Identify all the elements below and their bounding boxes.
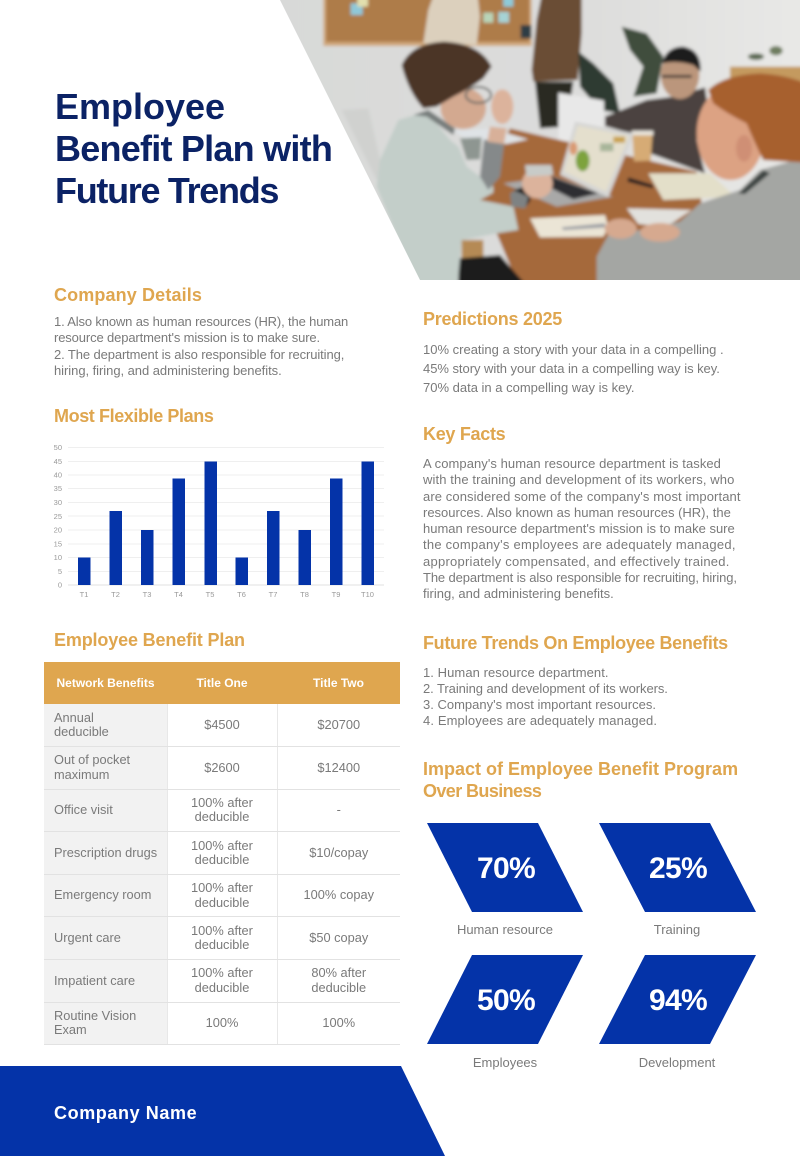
table: employee benefit plan xyxy=(44,662,400,1045)
table: employee benefit plan: - xyxy=(337,802,341,817)
bar chart: most flexible plans: 25 xyxy=(54,512,62,521)
text: company details xyxy=(54,314,348,378)
bar chart: most flexible plans: 20 xyxy=(54,526,62,534)
text: key facts: appropriately compensated, and effectively trained. xyxy=(423,554,730,568)
table: employee benefit plan: 100% after xyxy=(191,923,253,938)
table: employee benefit plan: 100% after xyxy=(191,965,253,980)
table: employee benefit plan: 100% after xyxy=(191,880,253,895)
heading: key facts: Key Facts xyxy=(423,424,505,444)
text: future trends list: 2. Training and development of its workers. xyxy=(423,681,668,696)
bar chart: most flexible plans: 40 xyxy=(54,470,62,480)
label: human resource: Human resource xyxy=(457,922,553,937)
table: employee benefit plan: Office visit xyxy=(54,802,113,817)
text: company details: resource department's mission is to make sure. xyxy=(54,330,320,345)
table: employee benefit plan: $20700 xyxy=(317,717,360,732)
text: company details: 1. Also known as human resources (HR), the human xyxy=(54,314,348,329)
text: key facts: A company's human resource department is tasked xyxy=(423,456,721,471)
stat: 50%: 50% xyxy=(477,984,535,1017)
bar chart: most flexible plans: T4 xyxy=(174,590,183,599)
table: employee benefit plan: deducible xyxy=(195,980,249,995)
table: employee benefit plan: Emergency room xyxy=(54,887,151,902)
text: future trends list: 4. Employees are adequately managed. xyxy=(423,713,657,728)
bar chart: most flexible plans: T3 xyxy=(143,590,151,599)
bar chart: most flexible plans: 5 xyxy=(58,567,62,576)
bar chart: most flexible plans: 0 xyxy=(58,580,62,590)
title xyxy=(55,86,332,211)
label: employees: Employees xyxy=(473,1055,537,1070)
heading: predictions 2025: Predictions 2025 xyxy=(423,309,562,329)
footer band xyxy=(0,1066,445,1156)
stat: 94%: 94% xyxy=(649,984,707,1017)
text: future trends list: 1. Human resource department. xyxy=(423,665,609,680)
text: key facts: are considered some of the company's most important xyxy=(423,488,741,504)
heading: impact of program: Over Business xyxy=(423,781,541,801)
table: employee benefit plan: Urgent care xyxy=(54,930,121,945)
text: predictions 2025: 10% creating a story with your data in a compelling . xyxy=(423,342,724,357)
heading: future trends: Future Trends On Employee Benefits xyxy=(423,633,728,653)
bar chart: most flexible plans: 50 xyxy=(54,443,62,452)
label: training: Training xyxy=(654,922,700,937)
text: company details: 2. The department is also responsible for recruiting, xyxy=(54,347,344,362)
stat shapes: four parallelograms xyxy=(427,823,756,1044)
text: predictions 2025 xyxy=(423,342,724,395)
bar chart: most flexible plans: 30 xyxy=(54,498,62,507)
table: employee benefit plan: maximum xyxy=(54,767,109,782)
bar chart: most flexible plans: T10 xyxy=(361,590,374,599)
heading: impact of program: Impact of Employee Benefit Program xyxy=(423,759,738,779)
table: employee benefit plan: $4500 xyxy=(204,717,240,732)
bar chart: most flexible plans: T8 xyxy=(300,590,309,599)
table: employee benefit plan: Annual xyxy=(54,710,94,725)
bar chart: most flexible plans: T9 xyxy=(332,590,340,599)
bar chart: most flexible plans: 45 xyxy=(54,457,62,466)
bar chart: most flexible plans: 10 xyxy=(54,553,62,562)
text: key facts: the company's employees are adequately managed, xyxy=(423,537,736,552)
bar chart: most flexible plans: 35 xyxy=(54,484,62,493)
table: employee benefit plan: Prescription drugs xyxy=(54,845,157,860)
text: company details: hiring, firing, and administering benefits. xyxy=(54,363,282,378)
table: employee benefit plan: Routine Vision xyxy=(54,1008,136,1023)
text: predictions 2025: 70% data in a compelling way is key. xyxy=(423,380,634,395)
table: employee benefit plan: deducible xyxy=(195,937,249,952)
bar chart: most flexible plans: T5 xyxy=(206,590,214,599)
heading: company details: Company Details xyxy=(54,285,202,305)
table: employee benefit plan: 100% after xyxy=(191,838,253,853)
table: employee benefit plan: 100% after xyxy=(191,795,253,810)
table: employee benefit plan: 80% after xyxy=(311,965,366,980)
heading: employee benefit plan: Employee Benefit Plan xyxy=(54,630,245,650)
bar chart: most flexible plans: T6 xyxy=(237,590,246,599)
table: employee benefit plan: deducible xyxy=(311,980,366,995)
table: employee benefit plan: Title Two xyxy=(313,676,364,690)
table: employee benefit plan: deducible xyxy=(195,809,249,824)
table: employee benefit plan: $12400 xyxy=(317,760,360,775)
text: key facts: resources. Also known as human resources (HR), the xyxy=(423,505,731,520)
table: employee benefit plan: deducible xyxy=(195,852,249,867)
text: predictions 2025: 45% story with your data in a compelling way is key. xyxy=(423,361,720,376)
footer: company name: Company Name xyxy=(54,1103,197,1123)
stat: 25%: 25% xyxy=(649,852,707,885)
text: key facts xyxy=(423,456,741,601)
text: key facts: firing, and administering benefits. xyxy=(423,586,614,601)
table: employee benefit plan: $2600 xyxy=(204,760,240,775)
label: development: Development xyxy=(639,1055,715,1070)
text: future trends list xyxy=(423,665,668,728)
table: employee benefit plan: Network Benefits xyxy=(56,676,155,690)
heading: most flexible plans: Most Flexible Plans xyxy=(54,406,213,426)
table: employee benefit plan: deducible xyxy=(54,724,109,739)
table: employee benefit plan: Out of pocket xyxy=(54,752,130,767)
photo: team meeting around a table xyxy=(280,0,800,280)
table: employee benefit plan: Exam xyxy=(54,1022,87,1037)
table: employee benefit plan: deducible xyxy=(195,895,249,910)
text: key facts: The department is also responsible for recruiting, hiring, xyxy=(423,570,737,585)
table: employee benefit plan: 100% xyxy=(322,1015,355,1030)
table: employee benefit plan: $10/copay xyxy=(309,845,368,860)
bar chart: most flexible plans xyxy=(54,443,384,599)
text: future trends list: 3. Company's most important resources. xyxy=(423,697,656,712)
stat: 70%: 70% xyxy=(477,852,535,885)
table: employee benefit plan: 100% copay xyxy=(304,887,374,902)
heading: impact of program xyxy=(423,759,738,801)
table: employee benefit plan: 100% xyxy=(206,1015,238,1030)
title: Future Trends xyxy=(55,170,278,211)
table: employee benefit plan: $50 copay xyxy=(309,930,368,945)
table: employee benefit plan: Title One xyxy=(196,676,248,690)
title: Benefit Plan with xyxy=(55,128,332,169)
table: employee benefit plan: Impatient care xyxy=(54,973,135,988)
bar chart: most flexible plans: T7 xyxy=(269,590,277,599)
title: Employee xyxy=(55,86,225,127)
bar chart: most flexible plans: T1 xyxy=(80,590,88,599)
text: key facts: with the training and development of its workers, who xyxy=(423,472,734,487)
bar chart: most flexible plans: 15 xyxy=(54,540,62,548)
text: key facts: human resource department's mission is to make sure xyxy=(423,521,735,536)
bar chart: most flexible plans: T2 xyxy=(111,590,120,599)
